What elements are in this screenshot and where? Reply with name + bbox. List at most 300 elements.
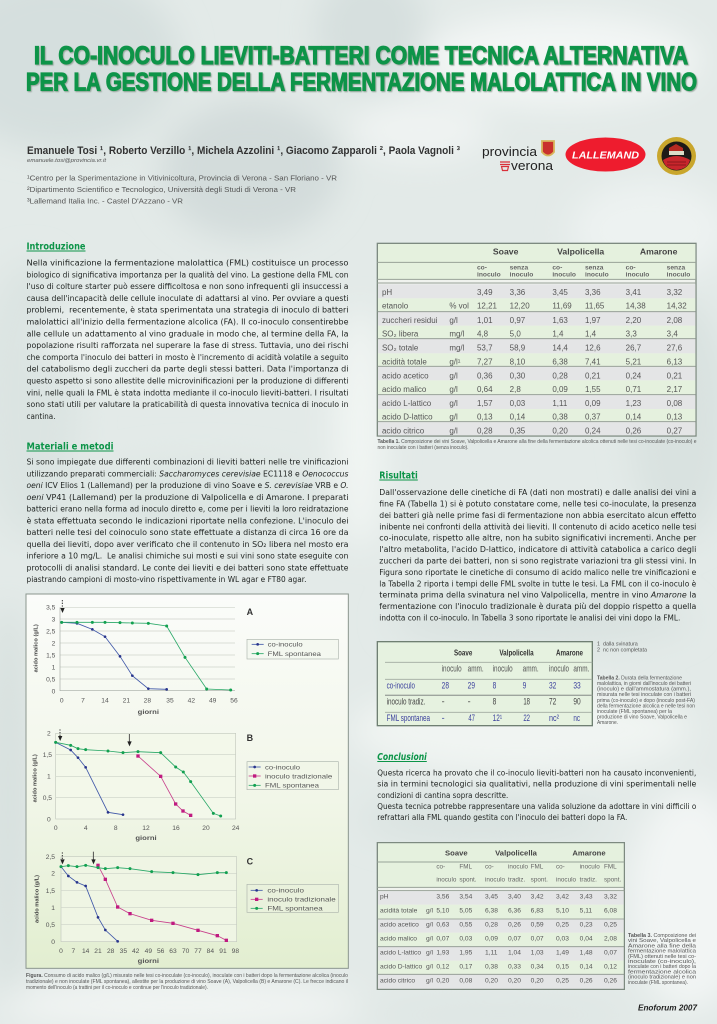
table 3 rows: 3,42: [531, 894, 544, 901]
table 1 rows: g/l: [449, 427, 458, 436]
table 3 headers: [436, 848, 621, 884]
affiliations: [27, 174, 338, 206]
table 3 rows: 3,45: [485, 894, 498, 901]
table 3 headers: co-: [485, 863, 494, 870]
table 1 rows: 0,24: [626, 371, 642, 380]
table 1 headers: [477, 247, 690, 279]
table 2 rows: [387, 680, 581, 723]
chart C: 91: [219, 948, 227, 955]
table 3 rows: 0,15: [556, 963, 569, 970]
table 2 caption: Tabella 2. Durata della fermentazione: [597, 676, 682, 682]
table 1 rows: etanolo: [382, 302, 409, 311]
table 3 rows: 3,54: [459, 894, 473, 901]
table 3 rows: 0,07: [436, 935, 450, 942]
table 2 caption: malolattica, in giorni dall'inoculo dei batteri: [597, 681, 691, 687]
text block: risultati: dei batteri già nelle prime fasi di fermentazione non abbia esercitato alcun effetto: [379, 511, 696, 520]
chart C: [35, 852, 338, 965]
table 3 rows: 0,17: [459, 963, 473, 970]
chart A: 2: [52, 641, 56, 648]
table 2 headers: [442, 647, 589, 674]
chart A: 3: [52, 617, 56, 624]
chart A: giorni: [138, 709, 159, 716]
table 2 caption: della fermentazione alcolica e nelle tesi non: [597, 704, 695, 710]
table 3 caption: Amarone alla fine della: [628, 943, 696, 949]
table 1 rows: 3,45: [552, 288, 568, 297]
table 3 rows: acido malico: [380, 935, 417, 942]
heading: Introduzione: Introduzione: [26, 242, 86, 252]
chart B: 2: [47, 731, 51, 738]
table 3 headers: co-: [436, 863, 445, 870]
chart A: 1,5: [46, 653, 56, 660]
table 1 rows: 0,24: [585, 427, 601, 436]
table 1 rows: 2,8: [510, 385, 521, 394]
table 3 rows: g/l: [426, 977, 434, 984]
table 1 rows: 3,49: [477, 288, 493, 297]
chart C: 1: [51, 905, 55, 912]
table 1 rows: 7,27: [477, 357, 493, 366]
table 3 rows: 0,20: [531, 977, 544, 984]
chart B: 8: [114, 825, 118, 832]
chart A: 3,5: [46, 605, 56, 612]
table 3 rows: g/l: [426, 963, 434, 970]
table 3 rows: 0,23: [580, 922, 593, 929]
table 3 headers: spont.: [531, 877, 548, 884]
table 2 rows: -: [442, 697, 445, 707]
table 2 caption: Amarone.: [597, 720, 618, 726]
text block: conclusioni: sia in termini tecnologici sia qualitativi, nella produzione di vini sperimentali nelle: [377, 780, 696, 789]
figure caption: Figura. Consumo di acido malico (g/L) misurato nelle tesi co-inoculate (co-inoculo), inoculate con i batteri dopo la fermentazione alcolica (inoculo: [26, 973, 348, 979]
table 2 rows: FML spontanea: [387, 713, 430, 723]
table 2 rows: 72: [549, 697, 556, 707]
table 3 rows: 0,20: [436, 977, 450, 984]
table 1 rows: 0,36: [477, 371, 493, 380]
table 1 rows: mg/l: [449, 344, 465, 353]
table 3 rows: 0,26: [580, 977, 593, 984]
chart C: 0,5: [46, 922, 55, 929]
table 1 rows: 0,09: [552, 385, 568, 394]
table 1 rows: 2,20: [626, 316, 642, 325]
logo: seal: [657, 137, 696, 175]
table 3 caption: fermentazione malolattica: [628, 949, 696, 955]
text block: introduzione: vini, nelle quali la FML è stata indotta mediante il co-inoculo lieviti-batteri. I risultati: [26, 387, 348, 397]
table 1 headers: co-: [552, 264, 562, 271]
chart C: 7: [71, 948, 75, 955]
table 1 caption: non inoculate con i batteri (senza inoculo).: [378, 445, 468, 451]
table 2 caption: produzione di vino Soave, Valpolicella e: [597, 714, 687, 720]
table 1 rows: [382, 288, 687, 436]
table 2 rows: nc: [573, 713, 580, 723]
text block: materiali e metodi: utilizzando preparati commerciali: Saccharomyces cerevisiae EC1118 e Oenococcus: [26, 469, 348, 478]
table 1 headers: Amarone: [640, 247, 678, 257]
table 3 rows: 0,12: [604, 963, 617, 970]
text block: introduzione: malolattici all'inizio della fermentazione alcolica (FA). Il co-inoculo consentirebbe: [26, 318, 349, 326]
table 1 rows: 14,38: [626, 302, 646, 311]
table 3 rows: 0,07: [531, 935, 544, 942]
table 1 rows: 0,64: [477, 385, 493, 394]
table 2 rows: 8: [493, 697, 496, 707]
table 1 rows: acido citrico: [382, 427, 425, 436]
table 3: wine composition after FML: [377, 843, 624, 989]
affiliations: ²Dipartimento Scientifico e Tecnologico, Università degli Studi di Verona - VR: [27, 185, 297, 194]
authors: Emanuele Tosi ¹, Roberto Verzillo ¹, Michela Azzolini ¹, Giacomo Zapparoli ², Paola Vagnoli ³: [27, 145, 460, 157]
chart A: 2,5: [46, 629, 56, 636]
table 1 rows: acido malico: [382, 385, 427, 394]
table 3 rows: 0,07: [508, 935, 521, 942]
table 3 rows: 0,28: [485, 922, 498, 929]
table 3 rows: 5,05: [459, 908, 473, 915]
table 3 rows: 1,04: [508, 949, 521, 956]
chart B: 0: [47, 816, 51, 823]
table 1 rows: 11,69: [552, 302, 572, 311]
table 1 rows: 0,09: [585, 399, 601, 408]
text block: conclusioni: Questa ricerca ha provato che il co-inoculo lieviti-batteri non ha causato inconvenienti,: [377, 768, 696, 778]
text block: materiali e metodi: inferiore a 10 mg/L. Le analisi chimiche sui mosti e sui vini sono state eseguite con: [26, 552, 348, 561]
table 2 caption: (inoculo) e dall'ammostatura (amm.),: [597, 686, 692, 692]
table 3 rows: 5,11: [580, 908, 592, 915]
table 1 rows: 0,13: [667, 413, 683, 422]
text block: conclusioni: refrattari alla FML quando gestita con l'inoculo dei batteri dopo la FA.: [377, 813, 627, 822]
chart B: co-inoculo: [265, 765, 300, 772]
text block: materiali e metodi: oeni ICV Elios 1 (Lallemand) per la produzione di vino Soave e S. cerevisiae VRB e O.: [26, 481, 348, 490]
chart B: 0,5: [43, 795, 52, 802]
table 3 rows: acido L-lattico: [380, 949, 421, 956]
chart C: 42: [132, 948, 140, 955]
table 3 rows: 0,20: [485, 977, 498, 984]
table 3 rows: 6,36: [508, 908, 521, 915]
table 3 rows: g/l: [426, 908, 434, 915]
table 2 caption: [597, 676, 695, 726]
text block: materiali e metodi: batteri nelle tesi del coinoculo sono state effettuate a distanza di circa 16 ore da: [26, 528, 349, 537]
table 3 rows: 0,25: [556, 922, 569, 929]
table 2 headers: amm.: [573, 664, 589, 674]
logo: provincia di Verona: provincia: [482, 144, 538, 159]
table 3 rows: 0,03: [556, 935, 569, 942]
chart C: 2,5: [46, 854, 55, 861]
author email: emanuele.tosi@provincia.vr.it: [27, 158, 106, 164]
table 3 rows: 1,48: [580, 949, 593, 956]
table 3 caption: inoculate con i batteri dopo la: [628, 964, 696, 970]
table 3 rows: 0,38: [485, 963, 498, 970]
table 1 rows: 14,4: [552, 344, 568, 353]
affiliations: ¹Centro per la Sperimentazione in Vitivinicoltura, Provincia di Verona - San Floriano - VR: [27, 174, 338, 182]
table 1 rows: 1,23: [626, 399, 642, 408]
table 1 rows: acidità totale: [382, 357, 427, 366]
table 2 rows: 29: [468, 680, 475, 690]
heading: Materiali e metodi: Materiali e metodi: [26, 442, 114, 452]
text block: risultati: co-inoculate, rispetto alle altre, non ha subito significativi incrementi. Anche per: [379, 534, 697, 543]
chart A: 56: [230, 698, 238, 705]
table 2 rows: 18: [523, 697, 530, 707]
table 2: FML duration: [377, 642, 592, 726]
table 3 rows: 0,25: [556, 977, 569, 984]
table 3 headers: Amarone: [572, 848, 606, 857]
table 3 headers: inoculo: [580, 863, 600, 870]
table 1 headers: inoculo: [626, 272, 649, 279]
text block: risultati: indotta con il co-inoculo. In Tabella 3 sono riportate le analisi dei vini dopo la FML.: [379, 614, 680, 623]
table 1 rows: mg/l: [449, 330, 465, 339]
table 1 rows: 0,28: [552, 371, 568, 380]
table 1 rows: 0,71: [626, 385, 642, 394]
table 3 rows: acido acetico: [380, 922, 419, 929]
table 3 rows: 1,03: [531, 949, 544, 956]
table 1 rows: 5,0: [510, 330, 521, 339]
logo: Lallemand: LALLEMAND: [572, 150, 639, 162]
table 1 rows: zuccheri residui: [382, 316, 438, 325]
table 3 caption: inoculate (co-inoculo),: [628, 959, 697, 965]
table 3 headers: FML: [459, 863, 472, 870]
table 3 caption: vini Soave, Valpolicella e: [628, 938, 696, 944]
table 3 headers: tradiz.: [580, 877, 597, 884]
figure caption: momento dell'inoculo (a trattini per il co-inoculo e continue per l'inoculo tradizionale).: [26, 985, 208, 991]
chart B: [33, 729, 338, 842]
table 3 rows: 6,83: [531, 908, 544, 915]
text block: materiali e metodi: oeni VP41 (Lallemand) per la produzione di Valpolicella e di Amarone. I preparati: [26, 493, 348, 502]
table 1 rows: 0,35: [510, 427, 526, 436]
table 2 notes: [597, 642, 647, 654]
chart C: acido malico (g/L): [35, 875, 41, 923]
text block: materiali e metodi: batterici erano nella forma ad inoculo diretto e, come per i lieviti la loro reidratazione: [26, 505, 349, 514]
chart B: giorni: [135, 835, 157, 842]
chart C: 0: [51, 939, 55, 946]
table 3 headers: Valpolicella: [495, 848, 538, 857]
text block: materiali e metodi: protocolli di analisi standard. Le conte dei lieviti e dei batteri sono state effettuate: [26, 563, 349, 572]
table 2 rows: 22: [523, 713, 530, 723]
chart A: co-inoculo: [268, 642, 303, 649]
table 2 rows: 9: [523, 680, 526, 690]
text block: introduzione: alle cellule un adattamento al vino graduale in modo che, al termine della FA, la: [26, 329, 349, 338]
text block: risultati: Figura sono riportate le cinetiche di consumo di acido malico nelle tre vinificazioni e: [379, 568, 696, 577]
chart C: 63: [169, 948, 177, 955]
chart C: 1,5: [46, 888, 55, 895]
table 3 caption: [628, 933, 697, 986]
chart A: acido malico (g/L): [34, 624, 40, 672]
table 1 rows: pH: [382, 288, 392, 297]
text block: risultati: la Tabella 2 riporta i tempi delle FML svolte in tutte le tesi. La FML con il co-inoculo è: [379, 578, 696, 588]
chart B: inoculo tradizionale: [265, 774, 333, 781]
table 3 rows: g/l: [426, 935, 434, 942]
table 2 headers: amm.: [468, 664, 484, 674]
table 3 rows: acido citrico: [380, 977, 415, 984]
chart A: 1: [52, 665, 56, 672]
table 3 rows: 6,38: [485, 908, 498, 915]
table 1 rows: g/l: [449, 399, 458, 408]
chart B: acido malico (g/L): [33, 754, 39, 802]
table 3 rows: 2,08: [604, 935, 617, 942]
chart C: 0: [59, 948, 63, 955]
table 1 caption: [378, 439, 696, 451]
text block: introduzione: questo aspetto si sono allestite delle microvinificazioni per la produzione di differenti: [26, 376, 348, 386]
figure caption: tradizionale) e non inoculate (FML spontanea), allestite per la produzione di vino Soave (A), Valpolicella (B) e Amarone (C). Le frecce indicano il: [26, 979, 348, 985]
table 1 rows: 0,37: [585, 413, 601, 422]
table 1 rows: 3,36: [585, 288, 601, 297]
table 3 headers: inoculo: [508, 863, 529, 870]
table 1 rows: 12,21: [477, 302, 498, 311]
table 1 rows: g/l: [449, 316, 458, 325]
text block: introduzione: cantina.: [26, 412, 56, 421]
chart A: 21: [123, 698, 130, 705]
chart C: 14: [82, 948, 90, 955]
text block: risultati: terminata prima della svinatura nel vino Valpolicella, mentre in vino Amarone la: [379, 591, 696, 600]
affiliations: ³Lallemand Italia Inc. - Castel D'Azzano - VR: [27, 196, 184, 206]
table 1 rows: 0,26: [626, 427, 642, 436]
chart C: inoculo tradizionale: [267, 897, 336, 904]
chart A: 35: [166, 698, 174, 705]
heading: Risultati: Risultati: [379, 470, 418, 482]
table 1 rows: 1,55: [585, 385, 601, 394]
table 1 rows: 1,4: [585, 330, 597, 339]
table 2 headers: inoculo: [493, 664, 513, 674]
table 1 rows: g/l: [449, 385, 458, 394]
table 2 headers: inoculo: [549, 664, 569, 674]
table 2 rows: nc²: [549, 713, 559, 723]
table 3 rows: 0,20: [508, 977, 521, 984]
text block: materiali e metodi: piastrando campioni di mosto-vino rispettivamente in WL agar e FT80 agar.: [26, 575, 306, 584]
table 1 rows: 1,11: [552, 399, 568, 408]
chart C: 35: [120, 948, 127, 955]
table 1 rows: 11,65: [585, 302, 605, 311]
table 3 rows: 3,43: [580, 894, 593, 901]
table 1 rows: g/l¹: [449, 357, 461, 366]
text block: introduzione: biologico di significativa importanza per la qualità del vino. La gestione della FML con: [26, 270, 348, 279]
chart A: 28: [144, 698, 151, 705]
table 1 rows: 0,38: [552, 413, 568, 422]
table 3 rows: 0,04: [580, 935, 593, 942]
text block: introduzione: [26, 258, 349, 421]
table 1 rows: 6,13: [667, 357, 683, 366]
table 1 rows: 0,14: [510, 413, 526, 422]
text block: materiali e metodi: è stata effettuata secondo le indicazioni riportate nella confezione. L'inoculo dei: [26, 515, 348, 525]
table 3 headers: spont.: [604, 877, 621, 884]
chart C: FML spontanea: [267, 906, 323, 913]
table 1 rows: acido L-lattico: [382, 399, 432, 408]
table 3 rows: 0,55: [459, 922, 473, 929]
table 1 rows: g/l: [449, 371, 458, 380]
text block: risultati: [379, 488, 697, 623]
table 3 headers: tradiz.: [508, 877, 525, 884]
table 2 headers: amm.: [523, 664, 539, 674]
chart B: 24: [232, 825, 240, 832]
chart A: [34, 600, 338, 716]
table 1 rows: 3,41: [626, 288, 642, 297]
table 1 headers: senza: [667, 264, 685, 271]
table 1 caption: Tabella 1. Composizione dei vini Soave, Valpolicella e Amarone alla fine della fermentazione alcolica ottenuti nelle tesi co-inoculate (co-inoculo) e: [378, 439, 696, 445]
table 1 headers: co-: [626, 264, 636, 271]
table 1 rows: 26,7: [626, 344, 642, 353]
chart C: 28: [107, 948, 115, 955]
chart C: 49: [145, 948, 152, 955]
text block: risultati: Dall'osservazione delle cinetiche di FA (dati non mostrati) e dalle analisi dei vini a: [379, 488, 696, 497]
chart B: 1: [47, 774, 51, 781]
table 1 rows: acido acetico: [382, 371, 429, 380]
table 1 rows: 0,27: [667, 427, 683, 436]
text block: risultati: fermentazione con l'inoculo tradizionale è durata più del doppio rispetto a quella: [379, 601, 696, 611]
logo: Lallemand: [566, 138, 646, 172]
chart C: 84: [207, 948, 214, 955]
table 3 rows: 0,59: [531, 922, 544, 929]
table 1 rows: 1,4: [552, 330, 564, 339]
chart C: 77: [194, 948, 202, 955]
text block: risultati: l'altro metabolita, l'acido D-lattico, indicatore di attività catabolica a carico degli: [379, 545, 696, 554]
table 1 rows: 58,9: [510, 344, 526, 353]
chart C: giorni: [138, 958, 159, 965]
footer: Enoforum 2007: Enoforum 2007: [638, 1002, 698, 1012]
logo: provincia di Verona: verona: [511, 158, 554, 173]
chart B: 16: [172, 825, 180, 832]
table 3 rows: g/l: [426, 949, 434, 956]
table 3 rows: 0,33: [508, 963, 521, 970]
table 1 rows: 0,30: [510, 371, 526, 380]
chart A: 0: [60, 698, 64, 705]
table 3 rows: acidità totale: [380, 908, 418, 915]
text block: introduzione: del catabolismo degli zuccheri da parte degli stessi batteri. Data l'importanza di: [26, 365, 348, 374]
table 3 rows: 6,08: [604, 908, 617, 915]
table 2 rows: 33: [573, 680, 581, 690]
table 3 rows: 5,10: [556, 908, 569, 915]
chart A: 0,5: [46, 677, 56, 684]
table 1 rows: 0,14: [626, 413, 642, 422]
table 3 rows: 0,25: [604, 922, 617, 929]
table 2 rows: 8: [493, 680, 496, 690]
table 3 rows: 5,10: [436, 908, 450, 915]
table 1 rows: 12,6: [585, 344, 601, 353]
table 3 rows: 0,26: [604, 977, 617, 984]
text block: conclusioni: [377, 768, 696, 822]
table 2 headers: Valpolicella: [499, 647, 534, 657]
table 1 headers: inoculo: [667, 272, 690, 279]
table 3 rows: 0,03: [459, 935, 473, 942]
table 1 rows: 0,08: [667, 399, 683, 408]
table 1 rows: 12,20: [510, 302, 530, 311]
table 3 rows: [380, 894, 617, 984]
chart A: 0: [52, 688, 56, 695]
chart B: 20: [202, 825, 210, 832]
table 1 headers: inoculo: [477, 272, 501, 279]
table 1 rows: 7,41: [585, 357, 601, 366]
text block: risultati: inibente nei confronti della attività dei lieviti. Il contenuto di acido acetico nelle tesi: [379, 522, 696, 531]
table 3 rows: 1,11: [485, 949, 498, 956]
text block: introduzione: problemi, recentemente, è stata sperimentata una strategia di inoculo di batteri: [26, 305, 348, 315]
chart C: 21: [94, 948, 102, 955]
table 1 headers: Soave: [493, 247, 519, 257]
table 1 rows: 0,20: [552, 427, 568, 436]
figure caption: [26, 973, 348, 991]
table 1 headers: inoculo: [552, 272, 576, 279]
text block: conclusioni: condizioni di cantina sopra descritte.: [377, 791, 508, 800]
chart C: 70: [182, 948, 190, 955]
table 1 rows: 1,57: [477, 399, 493, 408]
table 3 rows: 0,07: [604, 949, 617, 956]
table 2 caption: prima (co-inoculo) e dopo (inoculo post-FA): [597, 698, 695, 704]
table 3 rows: g/l: [426, 922, 434, 929]
table 1 rows: 2,08: [667, 316, 683, 325]
table 1 rows: 6,38: [552, 357, 568, 366]
table 3 rows: 3,42: [556, 894, 569, 901]
table 1 rows: 8,10: [510, 357, 526, 366]
chart A: 49: [209, 698, 217, 705]
table 1 rows: 1,63: [552, 316, 568, 325]
table 1: wine composition: [377, 243, 696, 436]
text block: introduzione: l'uso di colture starter può essere difficoltosa e non sono infrequenti gli insuccessi a: [26, 281, 349, 291]
table 3 caption: inoculate (FML spontanea).: [628, 980, 688, 986]
table 3 headers: spont.: [459, 877, 477, 884]
table 3 rows: 0,34: [531, 963, 544, 970]
table 3 rows: 1,95: [459, 949, 473, 956]
table 3 rows: 0,14: [580, 963, 593, 970]
text block: introduzione: sono stati utili per valutare la praticabilità di questa innovativa tecnica di inoculo in: [26, 400, 348, 409]
table 1 rows: 27,6: [667, 344, 683, 353]
table 3 rows: 0,09: [485, 935, 498, 942]
table 1 headers: inoculo: [585, 272, 609, 279]
